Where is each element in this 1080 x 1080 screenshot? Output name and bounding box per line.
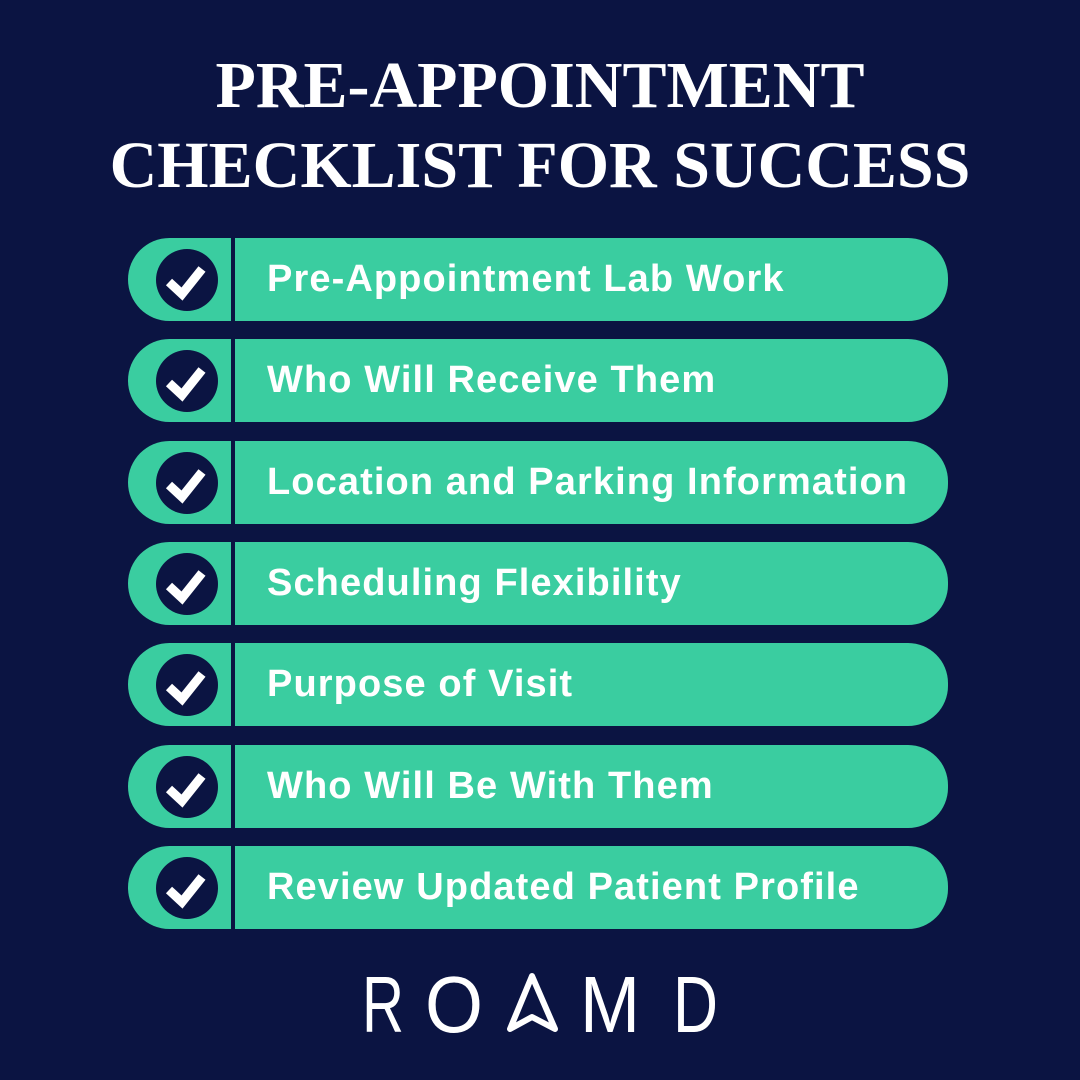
checklist item 6: Who Will Be With Them xyxy=(267,765,714,807)
title xyxy=(110,49,970,202)
checklist item 5 xyxy=(128,643,948,726)
logo xyxy=(362,965,718,1040)
checklist item 4: Scheduling Flexibility xyxy=(267,562,682,604)
checklist item 1: Pre-Appointment Lab Work xyxy=(267,258,785,300)
checklist item 1 xyxy=(128,238,948,321)
checklist item 7 xyxy=(128,846,948,929)
checklist item 2 xyxy=(128,339,948,422)
checklist item 6 xyxy=(128,745,948,828)
checklist item 4 xyxy=(128,542,948,625)
checklist item 2: Who Will Receive Them xyxy=(267,359,716,401)
checklist item 3: Location and Parking Information xyxy=(267,461,908,503)
checklist item 3 xyxy=(128,441,948,524)
checklist item 5: Purpose of Visit xyxy=(267,663,573,705)
title: PRE-APPOINTMENT xyxy=(216,49,864,122)
checklist item 7: Review Updated Patient Profile xyxy=(267,866,860,908)
title: CHECKLIST FOR SUCCESS xyxy=(110,129,970,202)
